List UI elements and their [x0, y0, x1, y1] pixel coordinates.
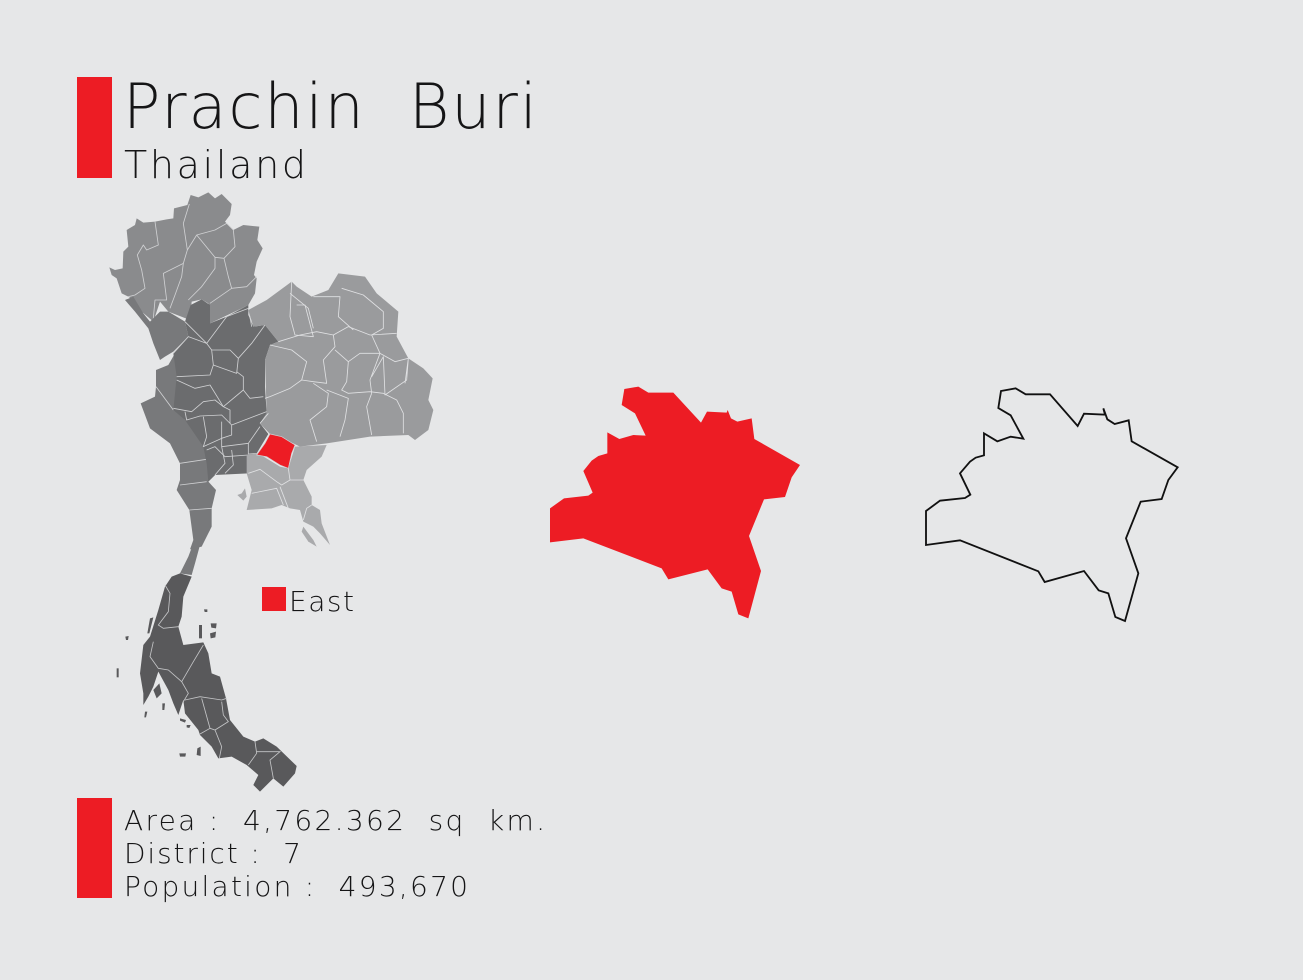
region: east: [237, 445, 330, 547]
area: Area : 4,762.362 sq km.: [124, 804, 545, 837]
isthmus strip: [180, 530, 210, 575]
stats text block: [124, 804, 545, 903]
region: west: [125, 297, 216, 549]
south province borders: [150, 585, 280, 778]
lower map: south: [117, 530, 297, 792]
region: south: [140, 573, 297, 792]
province outline: [926, 388, 1178, 621]
legend label: East: [289, 585, 354, 618]
islands: [117, 609, 217, 757]
province shape filled red: [550, 387, 800, 618]
highlighted province on map: [257, 434, 295, 468]
subtitle: Thailand: Thailand: [124, 143, 306, 187]
stats accent bar: [77, 798, 112, 898]
legend swatch: [262, 587, 286, 611]
map of Thailand by region: [109, 192, 433, 792]
region: central: [173, 299, 278, 482]
legend: East: [262, 585, 354, 618]
title accent bar: [77, 77, 112, 178]
title: Prachin Buri: Prachin Buri: [123, 70, 537, 143]
population: Population : 493,670: [124, 870, 468, 903]
upper map regions: [109, 192, 433, 549]
region: northeast: [248, 273, 433, 447]
region: north: [109, 192, 263, 323]
district count: District : 7: [124, 837, 301, 870]
